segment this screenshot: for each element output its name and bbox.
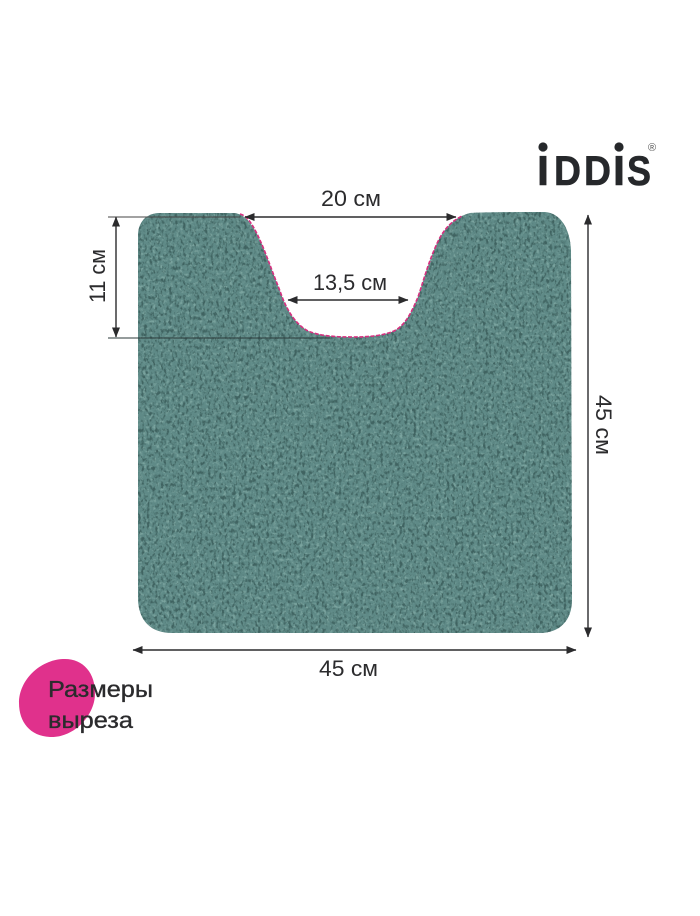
legend: cutout sizes bbox=[19, 659, 153, 737]
dimension: top width 20 cm: 20 см bbox=[321, 186, 381, 211]
legend: cutout sizes: Размеры bbox=[48, 676, 153, 702]
logo: IDDIS: D bbox=[584, 147, 611, 194]
logo: IDDIS: D bbox=[554, 147, 581, 194]
logo: IDDIS: S bbox=[627, 147, 651, 194]
dimension: cutout depth 11 cm: 11 см bbox=[85, 249, 110, 303]
cutout dashed outline bbox=[240, 214, 462, 337]
dimension: inner width 13,5 cm: 13,5 см bbox=[313, 270, 387, 295]
legend: cutout sizes: выреза bbox=[48, 707, 133, 733]
logo: IDDIS: I bbox=[537, 147, 549, 194]
dimension: height 45 cm: 45 см bbox=[591, 395, 616, 455]
logo: IDDIS: ® bbox=[648, 142, 656, 154]
logo: IDDIS bbox=[537, 142, 656, 194]
dimension: width 45 cm: 45 см bbox=[319, 656, 378, 681]
dimension: inner width 13,5 cm bbox=[288, 270, 408, 300]
logo: IDDIS: I bbox=[613, 147, 625, 194]
bath mat bbox=[138, 212, 572, 633]
